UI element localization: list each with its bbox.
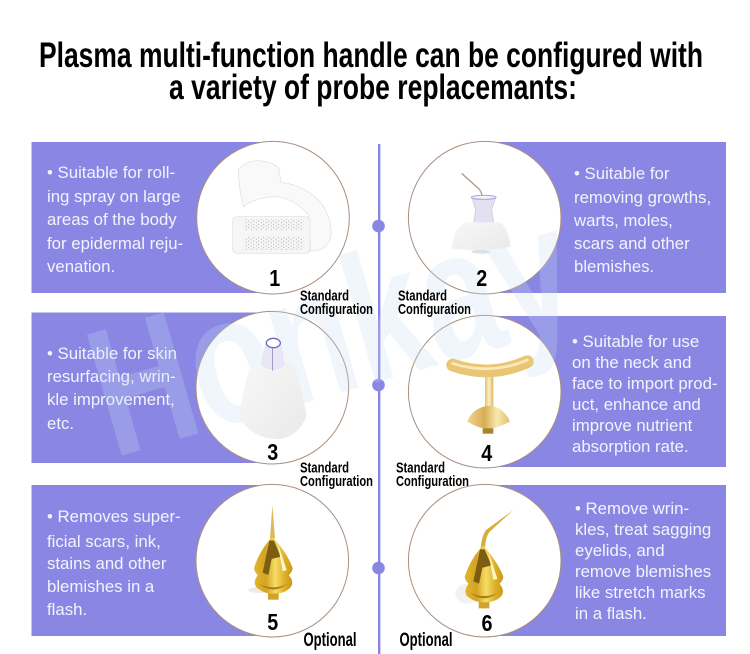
configuration labels: [300, 288, 471, 651]
probe numbers: 2: [476, 265, 487, 291]
description 6: kles, treat sagging: [575, 520, 711, 539]
description 5: ficial scars, ink,: [47, 532, 161, 551]
probe numbers: 1: [269, 265, 280, 291]
description 3: kle improvement,: [47, 390, 175, 409]
description 1: • Suitable for roll-: [47, 163, 175, 182]
icon: probe 6 bent gold tip: [455, 510, 513, 608]
description 1: for epidermal reju-: [47, 234, 183, 253]
panel: probe 1: [32, 142, 272, 293]
product circles: [196, 141, 561, 637]
configuration labels: Configuration: [398, 301, 471, 318]
watermark: Honkay: [67, 163, 595, 495]
description 5: • Removes super-: [47, 507, 181, 526]
description 2: scars and other: [574, 234, 690, 253]
description 2: blemishes.: [574, 257, 654, 276]
icon: probe 1 roller: [233, 161, 331, 253]
description 4: face to import prod-: [572, 374, 718, 393]
configuration labels: Configuration: [300, 301, 373, 318]
description 1: ing spray on large: [47, 187, 180, 206]
probe numbers: 3: [267, 439, 278, 465]
description 4: improve nutrient: [572, 416, 693, 435]
description 4: absorption rate.: [572, 437, 689, 456]
configuration labels: Configuration: [396, 473, 469, 490]
icon: probe 4 gold T: [453, 360, 527, 434]
configuration labels: Standard: [300, 460, 349, 476]
title: a variety of probe replacemants:: [169, 68, 577, 107]
configuration labels: Standard: [398, 288, 447, 304]
description 6: eyelids, and: [575, 541, 665, 560]
panel: probe 2: [485, 142, 726, 293]
configuration labels: Configuration: [300, 473, 373, 490]
description 3: etc.: [47, 414, 74, 433]
description 5: blemishes in a: [47, 577, 155, 596]
panel: probe 3: [32, 312, 272, 463]
configuration labels: Standard: [396, 460, 445, 476]
description 5: flash.: [47, 600, 87, 619]
probe numbers: 5: [267, 609, 278, 635]
timeline dots: [372, 220, 385, 574]
description 1: venation.: [47, 257, 115, 276]
probe numbers: 4: [481, 440, 492, 466]
description 4: uct, enhance and: [572, 395, 701, 414]
icon: probe 5 gold tip: [248, 505, 293, 600]
panel: probe 6: [485, 485, 726, 636]
description 6: • Remove wrin-: [575, 499, 689, 518]
probe numbers: [267, 265, 492, 636]
title: [39, 36, 703, 107]
description 2: • Suitable for: [574, 164, 670, 183]
description 2: warts, moles,: [573, 211, 673, 230]
description 3: resurfacing, wrin-: [47, 367, 176, 386]
configuration labels: Optional: [400, 630, 452, 651]
configuration labels: Standard: [300, 288, 349, 304]
description 6: in a flash.: [575, 604, 647, 623]
description 4: • Suitable for use: [572, 332, 699, 351]
center divider line: [378, 144, 380, 654]
description 4: on the neck and: [572, 353, 691, 372]
panel: probe 5: [32, 485, 272, 636]
description 6: like stretch marks: [575, 583, 706, 602]
icon: probe 2 wire tip: [452, 173, 511, 254]
probe numbers: 6: [482, 610, 492, 636]
icon: probe 3 cap: [238, 338, 307, 439]
description 5: stains and other: [47, 554, 167, 573]
description 2: removing growths,: [574, 188, 711, 207]
description 6: remove blemishes: [575, 562, 711, 581]
description 1: areas of the body: [47, 210, 177, 229]
description 3: • Suitable for skin: [47, 344, 177, 363]
configuration labels: Optional: [304, 630, 356, 651]
panel: probe 4: [485, 316, 726, 467]
